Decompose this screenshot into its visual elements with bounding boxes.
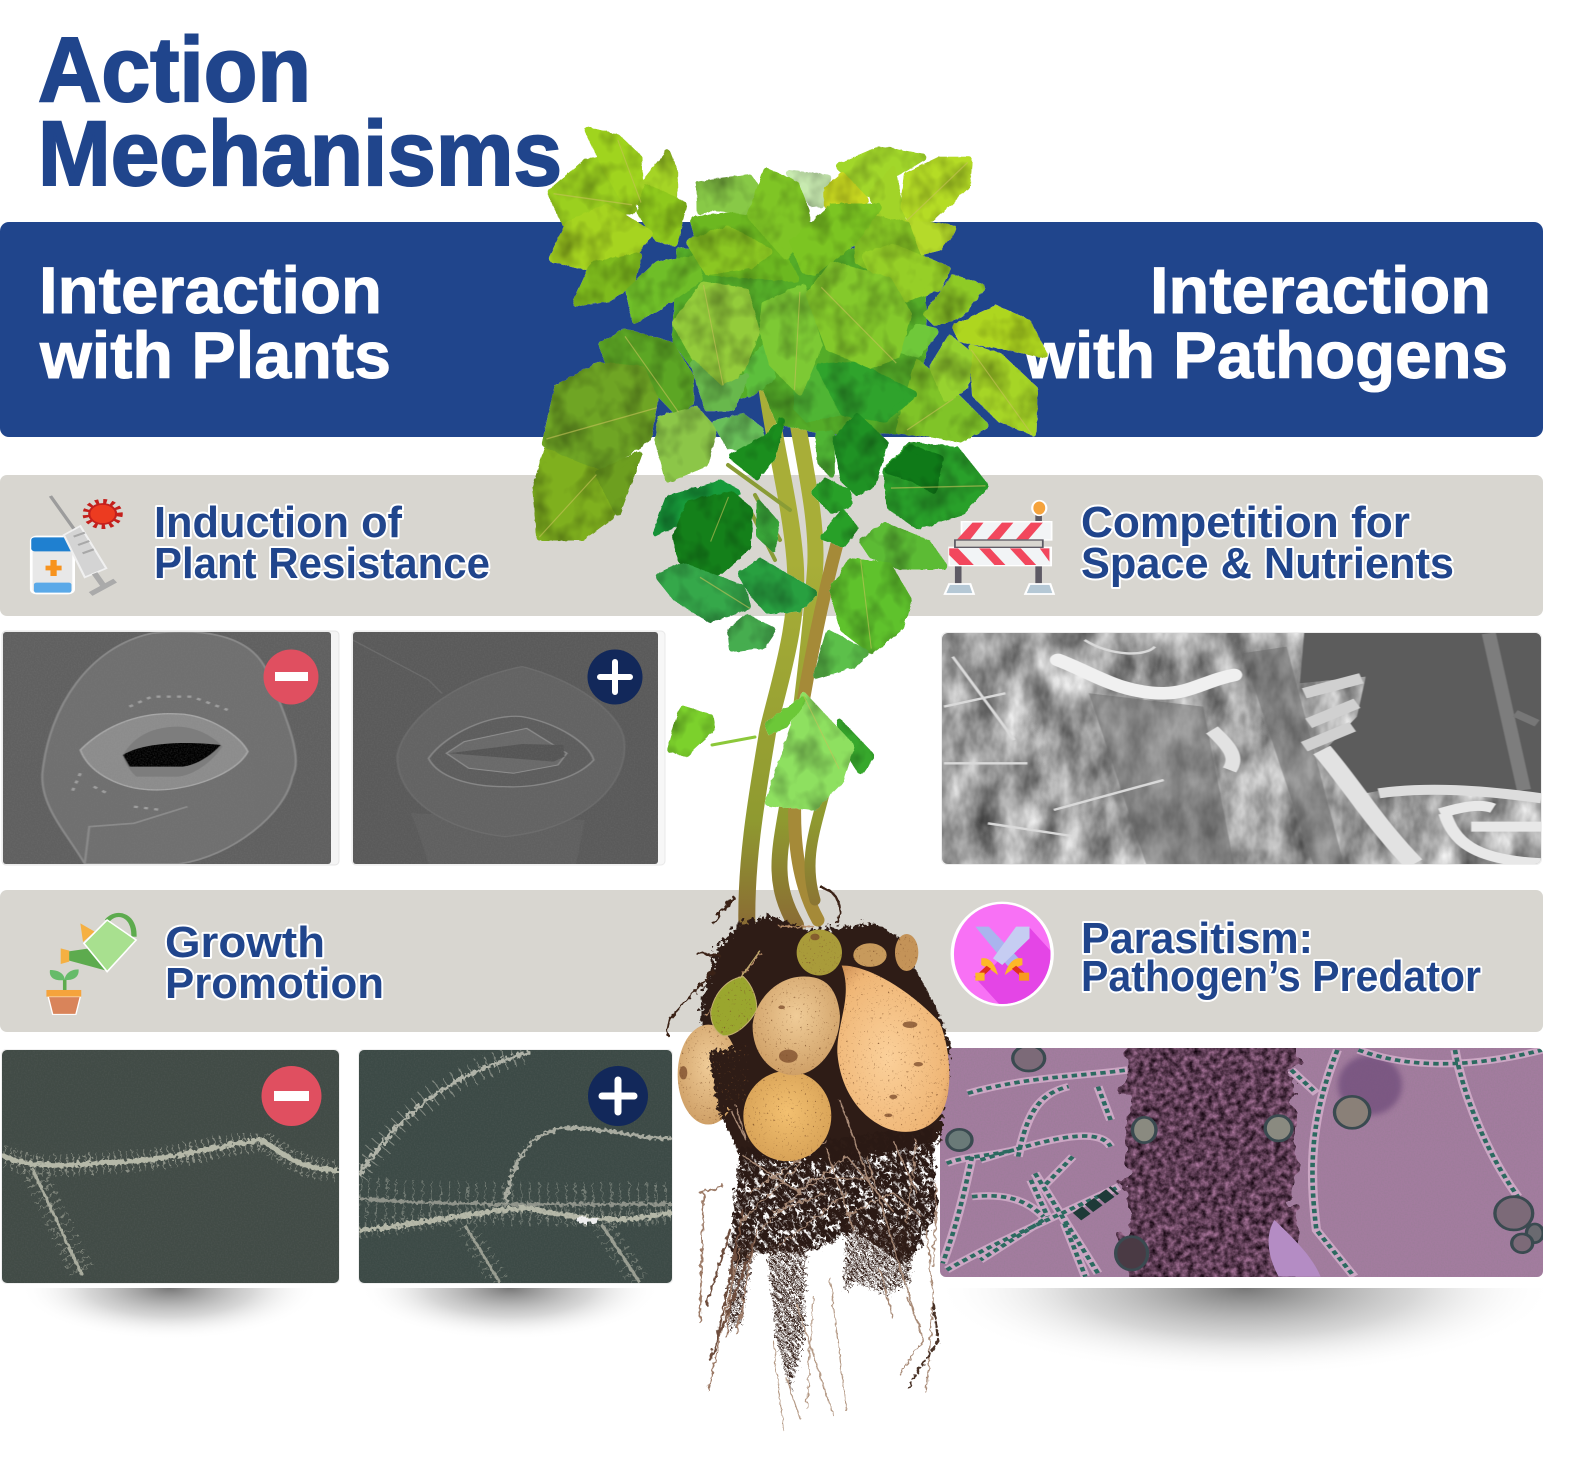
badge: plus (588, 1066, 648, 1126)
badge: minus (264, 650, 318, 704)
heading: parasitism, pathogen's predator: Pathogen’s Predator (1081, 952, 1481, 1001)
header banner: with Pathogens (1023, 318, 1508, 392)
heading: competition for space and nutrients: Space & Nutrients (1081, 539, 1454, 588)
heading: growth promotion: Promotion (165, 959, 384, 1008)
photo panel: parasitism micrograph (940, 1048, 1543, 1277)
icon: road barrier (945, 501, 1054, 594)
heading: induction of plant resistance: Induction of (154, 498, 402, 547)
shadow: lower photos (50, 1288, 1492, 1358)
leaf veins (539, 140, 1032, 769)
icon: syringe, bottle and virus (31, 496, 120, 594)
illustration: potato plant (535, 130, 1044, 1430)
header banner (0, 222, 1543, 437)
stems (712, 381, 838, 930)
heading: parasitism, pathogen's predator: Parasitism: (1081, 914, 1313, 963)
soil and root mass (667, 886, 950, 1430)
heading: growth promotion (165, 918, 384, 1008)
icon: crossed swords (951, 902, 1056, 1007)
photo panel: root with treatment (358, 1049, 673, 1284)
heading: competition for space and nutrients (1081, 498, 1454, 588)
icon: watering can and seedling (46, 915, 136, 1014)
heading: induction of plant resistance: Plant Resistance (154, 539, 490, 588)
photo panel: hyphae competing on root (941, 632, 1542, 865)
tubers (678, 930, 949, 1161)
band: upper row (0, 475, 1543, 616)
heading: growth promotion: Growth (165, 918, 325, 967)
photo panel: root without treatment (1, 1049, 340, 1284)
badge: minus (262, 1066, 322, 1126)
header banner: Interaction (1150, 253, 1491, 327)
band: lower row (0, 890, 1543, 1032)
title: Mechanisms (38, 103, 562, 205)
photo panel: stoma with treatment (352, 631, 665, 865)
heading: induction of plant resistance (154, 498, 490, 588)
photo panel: stoma without treatment (2, 631, 339, 865)
heading: parasitism, pathogen's predator (1081, 914, 1481, 1001)
title: Action (38, 19, 311, 121)
header banner: Interaction (39, 253, 382, 327)
header banner: with Plants (39, 318, 391, 392)
title (38, 19, 562, 205)
badge: plus (588, 650, 642, 704)
heading: competition for space and nutrients: Competition for (1081, 498, 1410, 547)
leaves (535, 130, 1044, 807)
